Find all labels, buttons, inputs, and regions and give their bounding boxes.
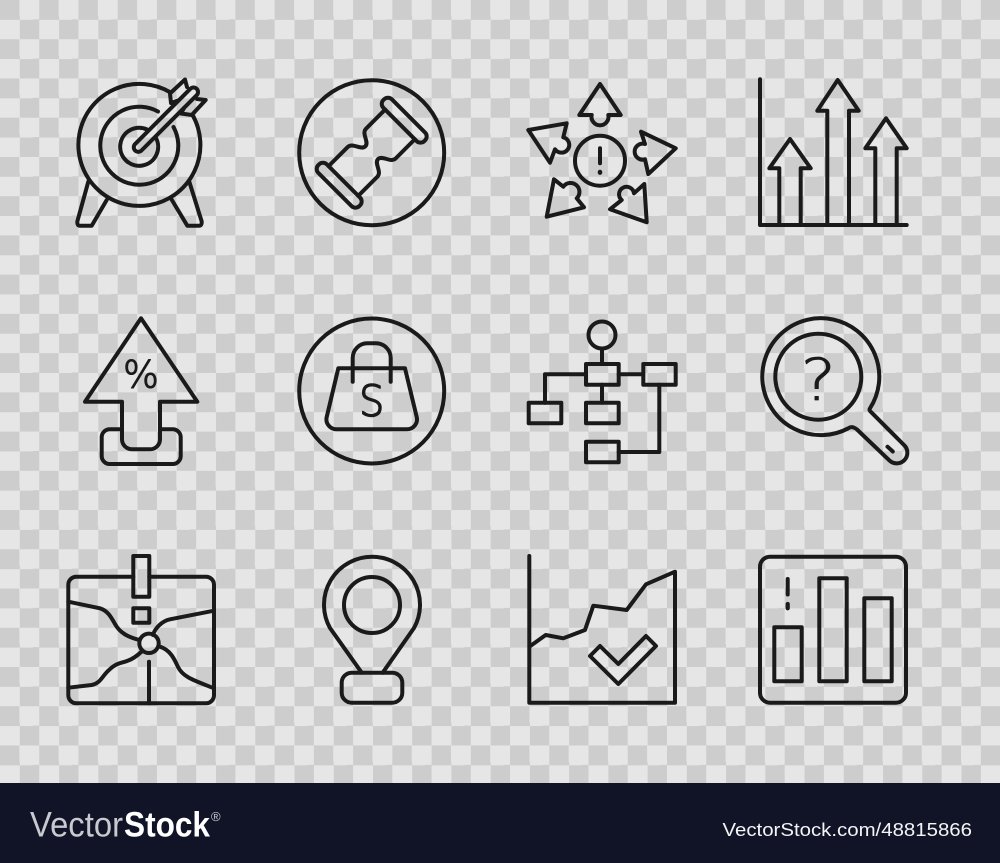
icon: map with alert and junction bbox=[68, 556, 214, 703]
icon: location pin on base bbox=[324, 557, 420, 703]
VectorStock logo: ® bbox=[211, 809, 221, 824]
VectorStock logo: Stock bbox=[124, 806, 210, 845]
icon: hourglass in circle bbox=[299, 80, 444, 225]
icon: bar chart in rounded square with alert bbox=[760, 557, 906, 703]
VectorStock logo: Vector bbox=[30, 806, 123, 845]
icon: magnifying glass with question mark: ? bbox=[801, 346, 836, 414]
footer bar bbox=[0, 783, 1000, 863]
icon: area chart with check mark bbox=[529, 556, 675, 703]
icon: percent up arrow from tray: % bbox=[123, 353, 159, 397]
image ID text: VectorStock.com/48815866 bbox=[722, 819, 972, 840]
icon: flowchart bbox=[529, 322, 676, 462]
icon: shopping bag in circle: S bbox=[359, 376, 384, 426]
icon: growth chart with three up arrows bbox=[760, 79, 907, 225]
icon: magnifying glass with question mark bbox=[762, 318, 907, 463]
icon: shopping bag in circle bbox=[299, 318, 444, 464]
icon: percent up arrow from tray bbox=[85, 318, 197, 464]
icon: target with arrow on stand bbox=[77, 80, 206, 226]
VectorStock logo bbox=[30, 806, 221, 845]
icon: alert circle with five outward arrows bbox=[528, 84, 676, 222]
